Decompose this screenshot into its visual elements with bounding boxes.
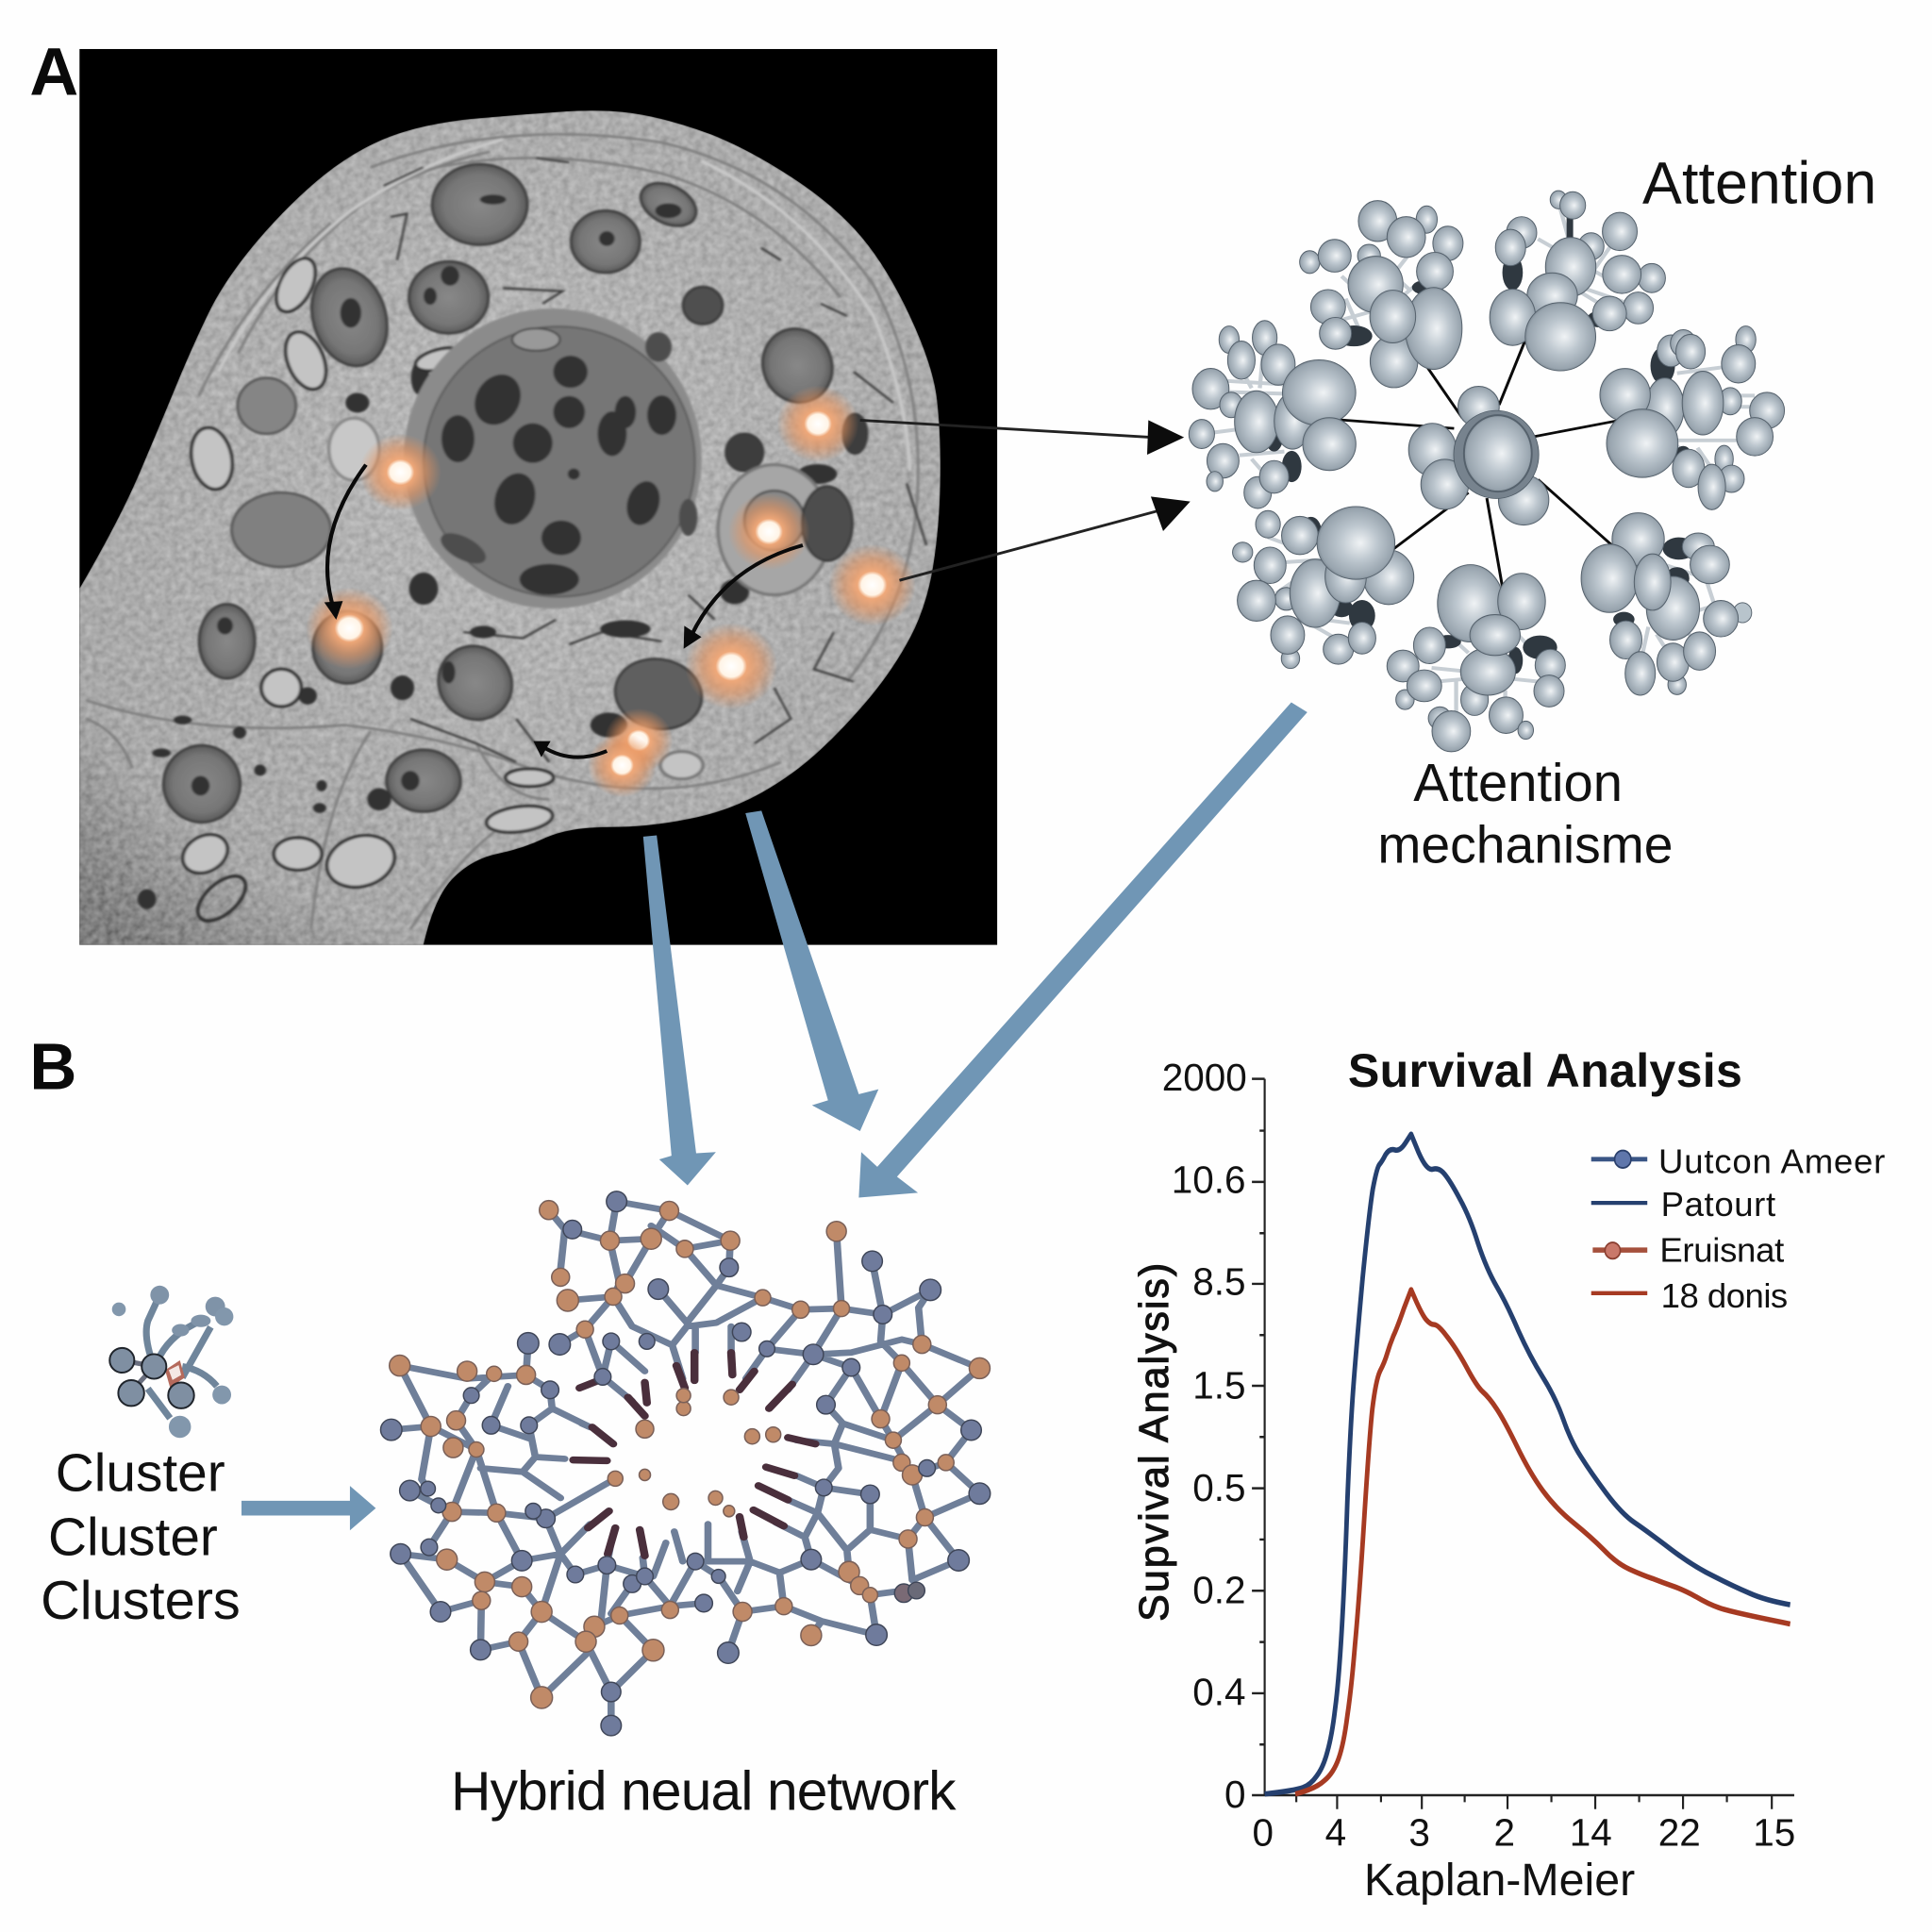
hybrid neural network diagram — [380, 1191, 991, 1736]
arrow: hotspot to attention lower — [899, 496, 1191, 580]
central sphere — [404, 308, 702, 608]
organism body — [79, 110, 941, 945]
red survival curve — [1295, 1290, 1790, 1794]
y tick labels: 1.5 — [1192, 1363, 1245, 1407]
legend labels: Uutcon Ameer — [1658, 1141, 1885, 1180]
arrow: curved left — [325, 465, 366, 620]
vacuoles — [175, 253, 853, 928]
connector lines — [1340, 334, 1622, 591]
text: cluster labels: Cluster — [56, 1443, 225, 1503]
cluster: top right — [1490, 191, 1665, 371]
chart title: Survival Analysis — [1348, 1044, 1742, 1097]
y tick labels: 0.2 — [1192, 1568, 1245, 1611]
arrow: curved right — [684, 545, 803, 649]
y tick labels — [1162, 1056, 1247, 1816]
cluster: bottom right — [1581, 513, 1752, 695]
center node — [1408, 387, 1549, 525]
blue arrow: image to network left — [643, 836, 716, 1185]
text: cluster labels: Clusters — [41, 1571, 241, 1631]
x tick labels: 3 — [1408, 1811, 1430, 1855]
x tick labels: 2 — [1494, 1811, 1515, 1855]
caption: Hybrid neual network: Hybrid neual network — [451, 1761, 957, 1823]
network bonds — [391, 1202, 979, 1725]
x tick labels: 0 — [1253, 1811, 1274, 1855]
chart: survival analysis — [1132, 1044, 1885, 1906]
y tick labels: 10.6 — [1172, 1158, 1245, 1201]
legend labels: 18 donis — [1661, 1276, 1788, 1315]
blue atoms — [380, 1191, 991, 1736]
blue arrow: clusters to network — [242, 1486, 375, 1530]
caption: Attention mechanisme — [1377, 753, 1674, 874]
x tick labels: 22 — [1658, 1811, 1701, 1855]
blue arrow: attention to network — [858, 702, 1307, 1198]
blue arrow: image to network middle — [745, 810, 878, 1131]
x tick labels — [1253, 1811, 1795, 1855]
panel A: micrograph — [79, 49, 997, 945]
dark inward spokes — [574, 1353, 815, 1556]
blue survival curve — [1265, 1134, 1790, 1794]
nuclei — [138, 164, 867, 909]
caption: Attention mechanisme: mechanisme — [1377, 815, 1674, 874]
heading: Attention: Attention — [1642, 151, 1876, 217]
x axis label: Kaplan-Meier — [1364, 1855, 1635, 1906]
text: cluster labels — [41, 1443, 241, 1631]
caption: Attention mechanisme: Attention — [1413, 753, 1623, 812]
text: cluster labels: Cluster — [48, 1507, 218, 1567]
legend labels — [1658, 1141, 1885, 1315]
y tick labels: 8.5 — [1192, 1260, 1245, 1304]
cluster: top left — [1300, 201, 1463, 388]
black image background — [79, 49, 997, 945]
x tick labels: 15 — [1753, 1811, 1795, 1855]
axes and ticks — [1252, 1079, 1794, 1809]
y tick labels: 0.5 — [1192, 1466, 1245, 1509]
orange atoms — [390, 1201, 990, 1708]
cluster: bottom — [1387, 565, 1565, 752]
cluster: right — [1600, 326, 1785, 509]
y tick labels: 0.4 — [1192, 1671, 1245, 1714]
y tick labels: 2000 — [1162, 1056, 1247, 1099]
attention molecular cluster — [1189, 191, 1785, 752]
arrow: hotspot to attention upper — [860, 420, 1184, 455]
cluster: left — [1189, 321, 1356, 508]
plot area — [1252, 1079, 1794, 1809]
legend key markers — [1591, 1151, 1647, 1293]
y tick labels: 0 — [1224, 1773, 1245, 1816]
cluster: bottom left — [1233, 507, 1414, 669]
panel label A: A — [29, 35, 78, 110]
icon: small cluster — [109, 1286, 233, 1438]
x tick labels: 14 — [1570, 1811, 1612, 1855]
legend labels: Patourt — [1661, 1185, 1775, 1224]
y axis label: Supvival Analysis) — [1132, 1263, 1177, 1622]
arrow: short lower — [533, 741, 607, 758]
legend labels: Eruisnat — [1659, 1230, 1784, 1269]
panel label B: B — [29, 1030, 76, 1104]
x tick labels: 4 — [1325, 1811, 1346, 1855]
glowing hotspots — [306, 386, 916, 797]
